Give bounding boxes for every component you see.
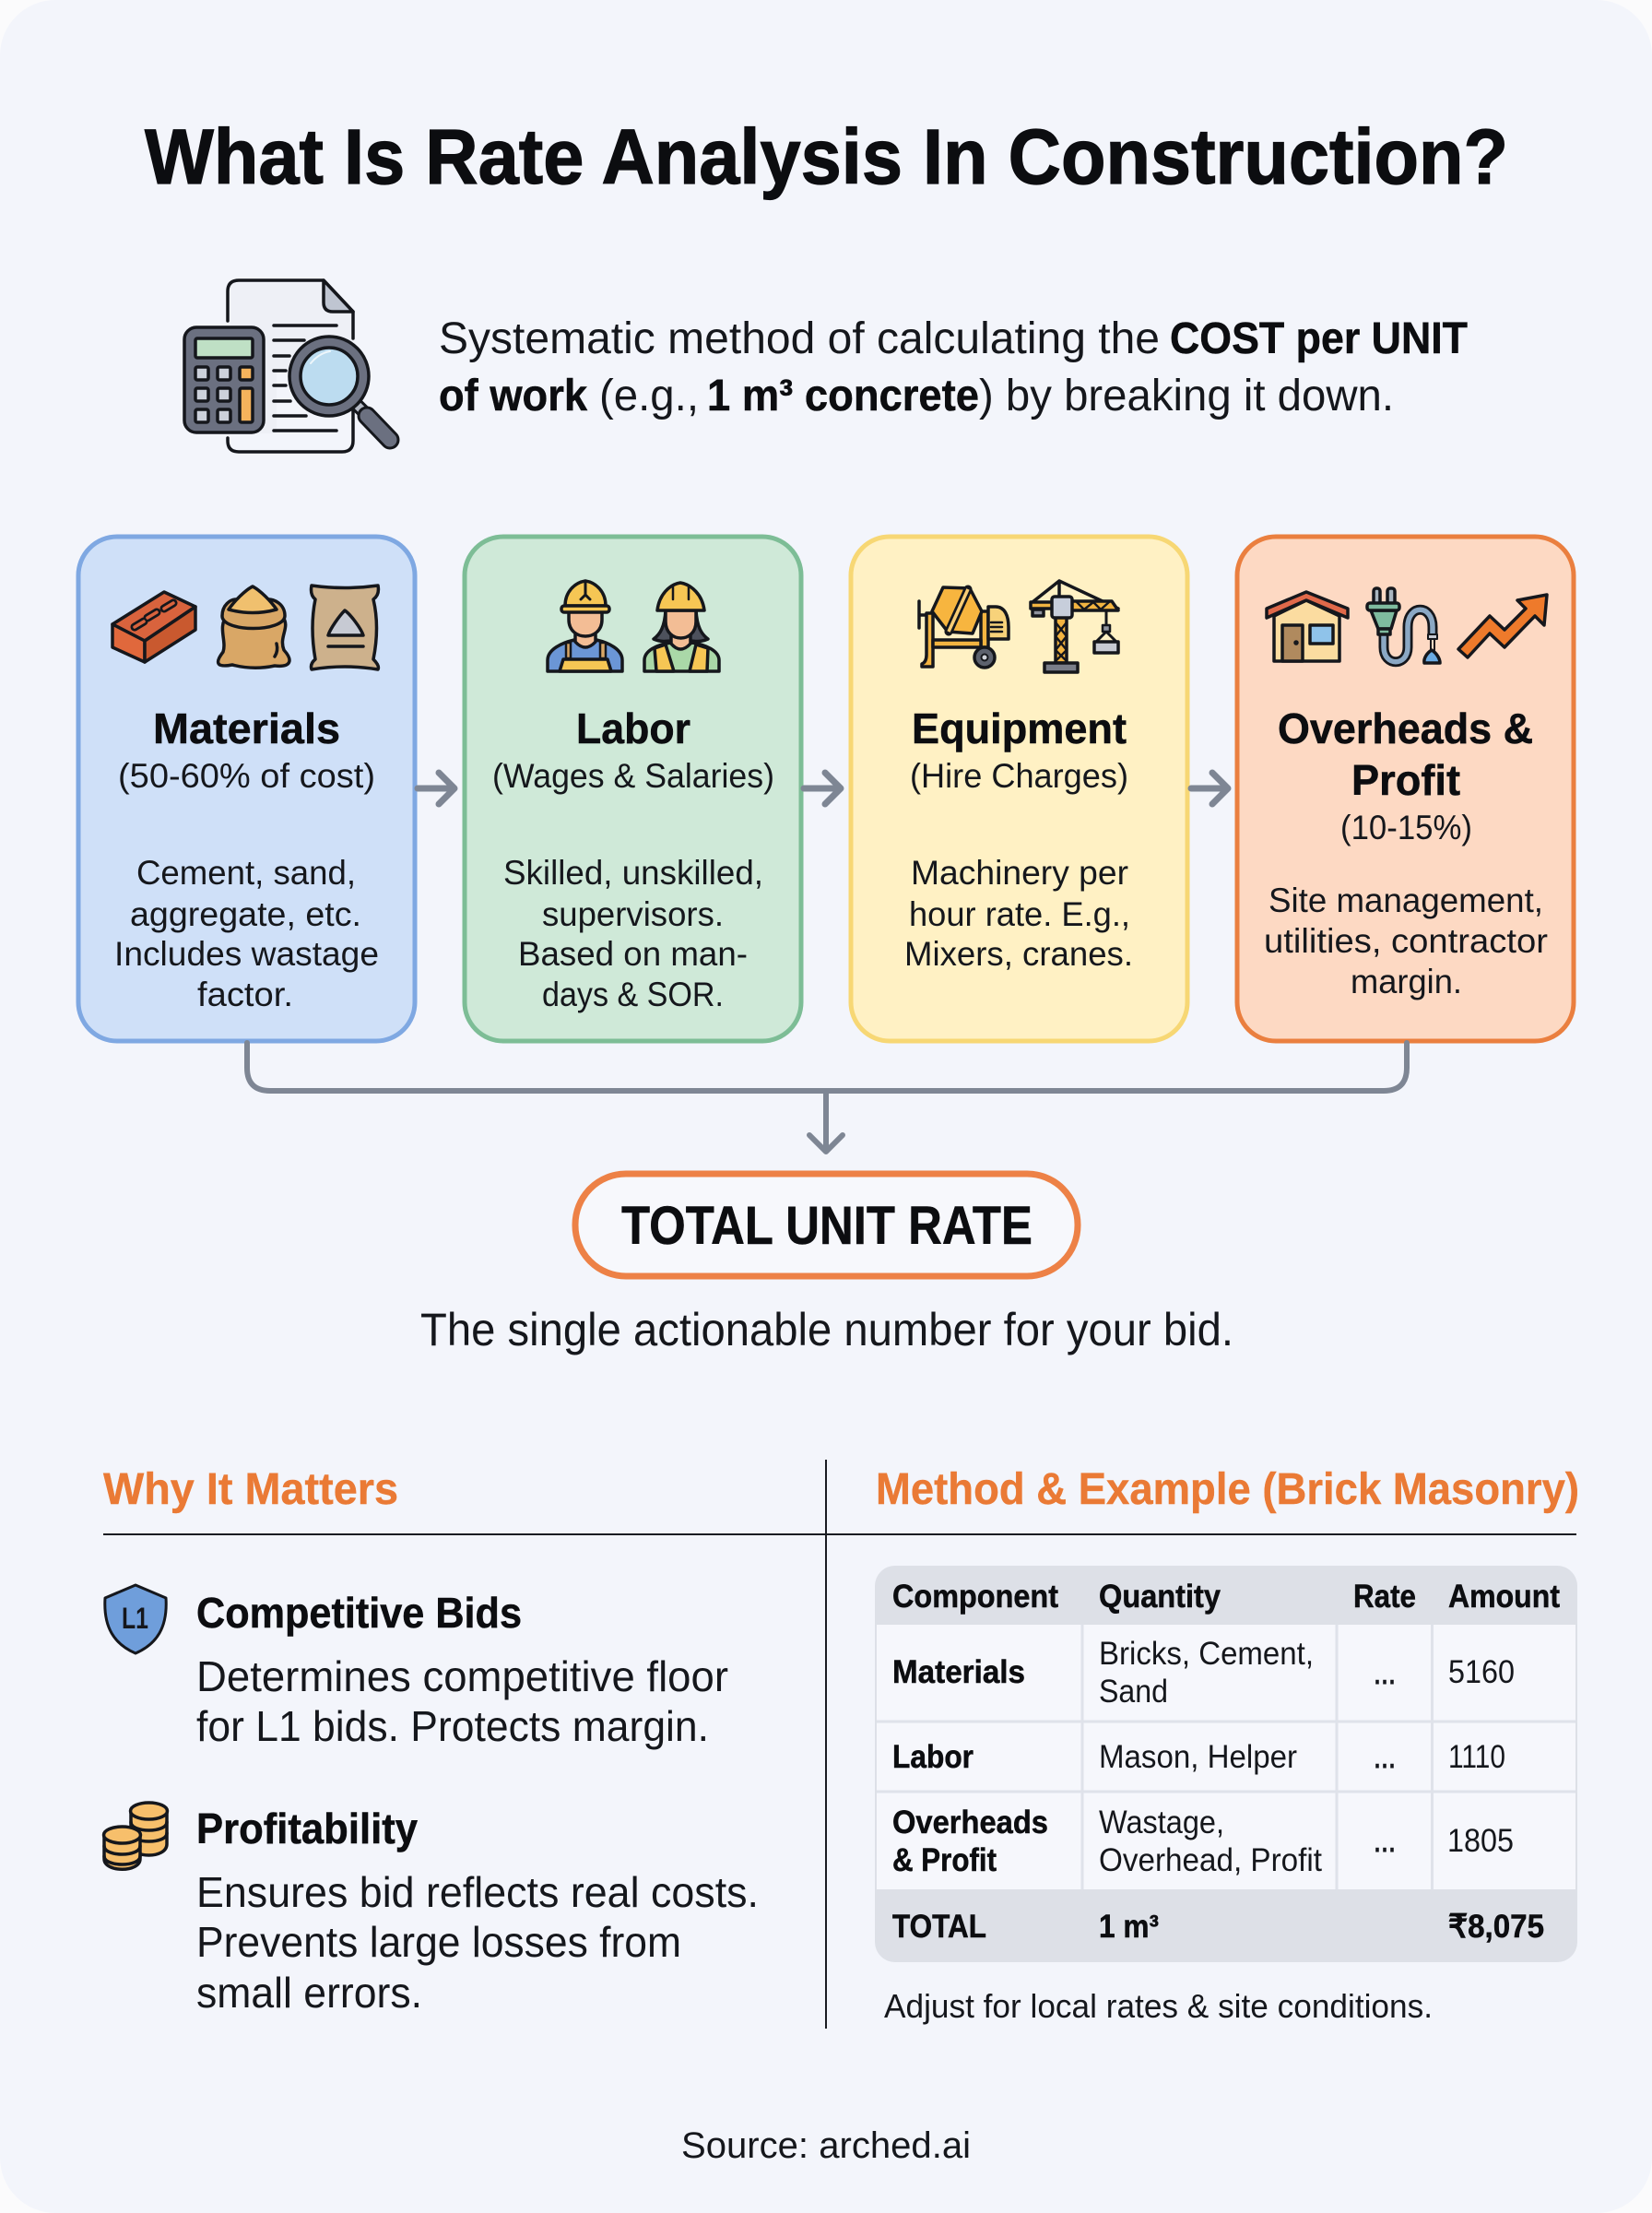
- row: labor: ...: [1374, 1739, 1396, 1775]
- icon: cement bag: [312, 586, 378, 669]
- card body: [1264, 882, 1548, 1000]
- block: competitive bids: for L1 bids. Protects margin.: [196, 1702, 709, 1750]
- card body: Machinery per: [911, 854, 1128, 892]
- card body: Site management,: [1268, 882, 1543, 919]
- row: labor: 1110: [1448, 1739, 1505, 1775]
- row: labor: Labor: [892, 1739, 974, 1775]
- icon: coin stacks: [103, 1803, 168, 1869]
- card heading: [1278, 704, 1533, 804]
- row: materials: Materials: [892, 1654, 1025, 1690]
- heading: method and example: Method & Example (Brick Masonry): [876, 1465, 1579, 1514]
- card heading: Materials: [153, 704, 340, 752]
- row: overheads and profit: Overhead, Profit: [1099, 1842, 1322, 1878]
- pill caption: The single actionable number for your bid.: [420, 1304, 1233, 1355]
- icon: L1 shield: [105, 1585, 166, 1653]
- card body: Cement, sand,: [136, 854, 356, 892]
- row: labor: [892, 1739, 1505, 1775]
- arrow: equipment to overheads: [1191, 773, 1228, 804]
- row: overheads and profit: ...: [1374, 1823, 1396, 1859]
- panel: equipment: [851, 537, 1187, 1041]
- title: What Is Rate Analysis In Construction?: [145, 113, 1508, 200]
- intro text: (e.g.,: [599, 372, 699, 420]
- card heading: Overheads &: [1278, 704, 1533, 752]
- bracket connector with down arrow: [247, 1043, 1407, 1152]
- card subheading: (10-15%): [1340, 809, 1472, 846]
- card body: [114, 854, 379, 1013]
- arrow: labor to equipment: [804, 773, 841, 804]
- intro text: Systematic method of calculating the: [439, 314, 1160, 363]
- table header: [892, 1579, 1560, 1615]
- card body: Mixers, cranes.: [904, 935, 1133, 973]
- card subheading: (Hire Charges): [910, 757, 1128, 795]
- icon: L1 shield: L1: [122, 1602, 148, 1635]
- panel: overheads and profit: [1237, 537, 1574, 1041]
- block: profitability: Ensures bid reflects real costs.: [196, 1868, 759, 1916]
- card body: supervisors.: [542, 895, 724, 933]
- card body: utilities, contractor: [1264, 922, 1548, 960]
- card body: margin.: [1351, 963, 1462, 1000]
- row: overheads and profit: Wastage,: [1099, 1805, 1224, 1840]
- intro text: 1 m³ concrete: [707, 372, 979, 420]
- card body: days & SOR.: [542, 976, 724, 1013]
- card heading: Profit: [1351, 756, 1460, 804]
- icon: male worker: [548, 581, 622, 671]
- table header: Amount: [1448, 1579, 1560, 1615]
- arrow: materials to labor: [418, 773, 454, 804]
- row: total: TOTAL: [892, 1909, 986, 1945]
- table note: Adjust for local rates & site conditions.: [884, 1987, 1433, 2025]
- intro text: [439, 314, 1468, 420]
- intro text: of work: [439, 372, 587, 420]
- card body: factor.: [197, 976, 293, 1013]
- table header: Rate: [1353, 1579, 1416, 1615]
- row: total: [892, 1909, 1544, 1945]
- panel: labor: [465, 537, 801, 1041]
- card subheading: (50-60% of cost): [118, 757, 375, 795]
- intro text: COST per UNIT: [1170, 314, 1468, 363]
- card body: aggregate, etc.: [130, 895, 361, 933]
- block: profitability: small errors.: [196, 1969, 422, 2017]
- block: competitive bids: [196, 1589, 728, 1750]
- row: materials: 5160: [1448, 1654, 1515, 1690]
- block: profitability: [196, 1805, 759, 2017]
- card subheading: (Wages & Salaries): [492, 757, 774, 795]
- panel: materials: [78, 537, 415, 1041]
- vertical divider: [825, 1460, 827, 2029]
- table header: Quantity: [1099, 1579, 1221, 1615]
- block: competitive bids: Competitive Bids: [196, 1589, 522, 1637]
- card body: Based on man-: [518, 935, 748, 973]
- card heading: Labor: [576, 704, 690, 752]
- card body: Skilled, unskilled,: [503, 854, 763, 892]
- cost table: [875, 1566, 1577, 1962]
- horizontal divider: [103, 1533, 1576, 1535]
- card body: Includes wastage: [114, 935, 379, 973]
- total unit rate pill: TOTAL UNIT RATE: [621, 1196, 1032, 1256]
- row: total: 1 m³: [1099, 1909, 1159, 1945]
- total unit rate pill: [575, 1174, 1078, 1276]
- row: materials: Bricks, Cement,: [1099, 1636, 1314, 1672]
- row: materials: ...: [1374, 1655, 1396, 1691]
- icon: brick: [112, 592, 195, 662]
- row: overheads and profit: Overheads: [892, 1805, 1048, 1840]
- icon: document with calculator and magnifier: [184, 280, 390, 452]
- heading: why it matters: Why It Matters: [103, 1465, 398, 1514]
- icon: cement mixer: [919, 587, 1009, 668]
- icon: rising arrow: [1458, 595, 1547, 657]
- source line: Source: arched.ai: [681, 2125, 971, 2166]
- card body: [904, 854, 1133, 973]
- row: materials: [892, 1636, 1515, 1710]
- icon: plug and cable: [1367, 588, 1440, 663]
- card heading: Equipment: [912, 704, 1127, 752]
- intro text: ) by breaking it down.: [979, 372, 1394, 420]
- card body: [503, 854, 763, 1013]
- block: profitability: Prevents large losses from: [196, 1918, 681, 1966]
- block: profitability: Profitability: [196, 1805, 418, 1852]
- block: competitive bids: Determines competitive floor: [196, 1652, 728, 1700]
- icon: house: [1267, 592, 1348, 661]
- row: total: ₹8,075: [1448, 1909, 1544, 1945]
- row: overheads and profit: & Profit: [892, 1842, 997, 1878]
- row: materials: Sand: [1099, 1674, 1168, 1710]
- icon: female worker: [644, 583, 719, 671]
- row: overheads and profit: [892, 1805, 1514, 1878]
- icon: tower crane: [1031, 581, 1118, 672]
- icon: sand sack: [218, 586, 289, 668]
- table header: Component: [892, 1579, 1058, 1615]
- card body: hour rate. E.g.,: [909, 895, 1130, 933]
- row: labor: Mason, Helper: [1099, 1739, 1297, 1775]
- row: overheads and profit: 1805: [1447, 1823, 1514, 1859]
